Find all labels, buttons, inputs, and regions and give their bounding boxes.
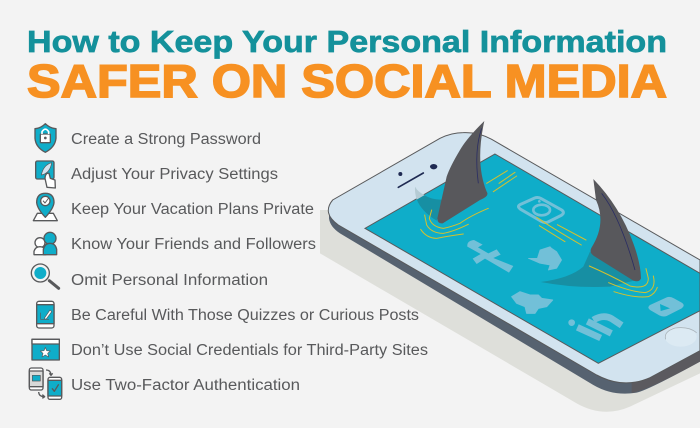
icon: browser window with star	[32, 339, 59, 360]
tip 3: Keep Your Vacation Plans Private	[71, 201, 314, 218]
tip 2: Adjust Your Privacy Settings	[71, 166, 278, 183]
tips list	[71, 131, 428, 394]
icons lower	[29, 264, 62, 399]
phone screen	[365, 154, 700, 363]
tip 5: Omit Personal Information	[71, 272, 268, 289]
icon: linkedin	[568, 317, 622, 338]
icon: people	[34, 232, 57, 255]
tip 4: Know Your Friends and Followers	[71, 236, 316, 253]
icon: map pin	[33, 193, 57, 221]
phone side edge dark section	[632, 343, 700, 393]
icon: touch settings	[36, 161, 55, 188]
home button	[665, 327, 697, 347]
fin shadow right	[541, 252, 637, 287]
icon: youtube	[648, 297, 684, 317]
icon: facebook	[467, 240, 513, 273]
shark fin left	[437, 121, 487, 223]
phone side edge	[329, 207, 700, 394]
illustration: phone with shark fins	[320, 121, 700, 412]
icon: magnifying glass	[31, 264, 59, 288]
tip 8: Use Two-Factor Authentication	[71, 377, 300, 394]
icons upper	[33, 124, 57, 255]
title	[27, 24, 667, 107]
phone top face	[328, 133, 700, 383]
tip 1: Create a Strong Password	[71, 131, 261, 148]
icon: snapchat	[512, 292, 553, 313]
icon: two-factor phones	[29, 368, 62, 399]
shark fin right	[591, 179, 641, 281]
water ripples	[421, 171, 657, 297]
icon: instagram	[518, 197, 563, 223]
tip 6: Be Careful With Those Quizzes or Curious Posts	[71, 307, 419, 324]
fin shadow tip over bezel	[415, 187, 425, 200]
tip 7: Don’t Use Social Credentials for Third-Party Sites	[71, 342, 428, 359]
phone shadow	[320, 210, 700, 412]
icon: phone with pen	[37, 301, 54, 328]
icon: twitter	[528, 247, 562, 270]
icon: shield with lock	[35, 124, 56, 152]
title line 2: SAFER ON SOCIAL MEDIA	[27, 55, 667, 107]
title line 1: How to Keep Your Personal Information	[27, 24, 667, 59]
fin shadow left	[417, 195, 444, 221]
phone speaker and camera	[398, 164, 437, 187]
